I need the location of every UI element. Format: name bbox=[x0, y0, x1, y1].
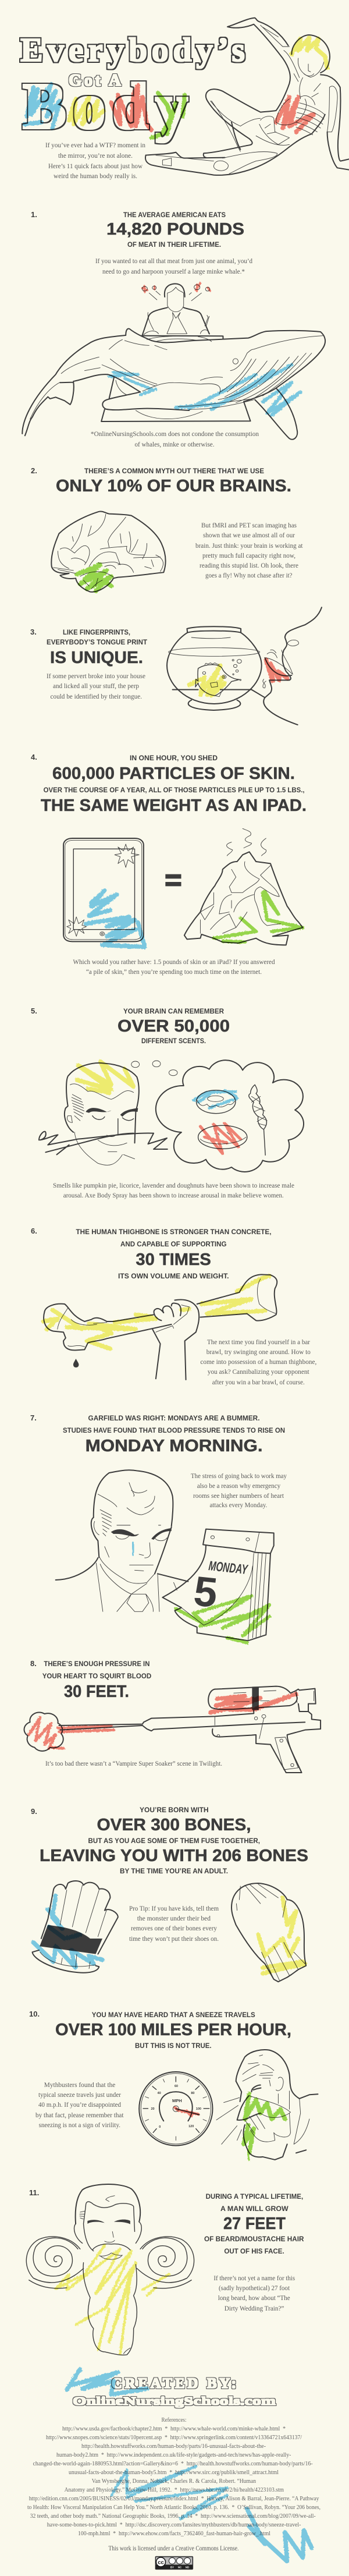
intro text bbox=[45, 141, 145, 180]
heading: BY THE TIME YOU’RE AN ADULT. bbox=[120, 1867, 228, 1875]
icon: Creative Commons badge: BY bbox=[170, 2566, 174, 2568]
text block: reading this stupid list. Oh look, there bbox=[200, 561, 298, 569]
heading: MONDAY MORNING. bbox=[86, 1437, 263, 1455]
heading: OUT OF HIS FACE. bbox=[224, 2247, 284, 2255]
number: 11. bbox=[29, 2188, 39, 2197]
footnote: *OnlineNursingSchools.com does not condone the consumption bbox=[91, 430, 259, 438]
footnote bbox=[91, 430, 259, 448]
text block: Mythbusters found that the bbox=[44, 2081, 115, 2089]
panel: fact 11 beard bbox=[26, 2184, 304, 2355]
heading bbox=[56, 467, 291, 495]
text block: by that fact, please remember that bbox=[35, 2111, 124, 2119]
text block bbox=[195, 521, 303, 579]
text block: typical sneeze travels just under bbox=[38, 2090, 121, 2099]
panel: fact 1 whale bbox=[22, 210, 325, 448]
heading: YOUR BRAIN CAN REMEMBER bbox=[123, 1007, 224, 1015]
text block: also be a reason why emergency bbox=[197, 1482, 280, 1490]
crayon scribbles on whale bbox=[109, 284, 301, 415]
references bbox=[27, 2417, 320, 2537]
heading: OF MEAT IN THEIR LIFETIME. bbox=[127, 240, 221, 249]
text block: brawl, try swinging one around. How to bbox=[206, 1348, 311, 1356]
text block bbox=[53, 1181, 294, 1199]
heading: OVER 100 MILES PER HOUR, bbox=[55, 2021, 291, 2039]
chart: speedometer: MPH bbox=[172, 2098, 182, 2103]
icon: pile of skin bbox=[184, 828, 302, 945]
heading bbox=[55, 2011, 291, 2050]
calendar text bbox=[191, 1558, 250, 1617]
references: Van Wynsberghe, Donna, Noback, Charles R. & Carola, Robert. “Human bbox=[92, 2478, 257, 2485]
text block: removes one of their bones every bbox=[131, 1924, 217, 1932]
text block: sneezing is not a sign of virility. bbox=[39, 2121, 120, 2129]
number: 5. bbox=[31, 1007, 37, 1015]
chart: speedometer: 60 bbox=[174, 2085, 178, 2088]
heading: GARFIELD WAS RIGHT: MONDAYS ARE A BUMMER. bbox=[88, 1414, 259, 1422]
illustration: open hand with sleeve bbox=[32, 1881, 118, 1973]
references: to Health: How Visceral Manipulation Can Help You.” North Atlantic Books, 2010. p. 136. * O’Sullivan, Robyn. “Your 206 bones, bbox=[27, 2504, 320, 2511]
heading bbox=[76, 1228, 271, 1280]
crayon scribble on skin pile bbox=[213, 892, 302, 942]
title: Body bbox=[23, 70, 188, 143]
text block: arousal. Axe Body Spray has been shown to increase arousal in make believe women. bbox=[63, 1191, 284, 1199]
heading bbox=[117, 1007, 230, 1045]
text block bbox=[95, 257, 252, 275]
calendar text: MONDAY bbox=[208, 1558, 250, 1577]
intro text: weird the human body really is. bbox=[54, 172, 137, 180]
panel: footer credits and references bbox=[27, 2369, 320, 2570]
text block: If you wanted to eat all that meat from just one animal, you’d bbox=[95, 257, 252, 265]
heading bbox=[40, 1806, 308, 1875]
crayon scribbles on footer bbox=[67, 2369, 312, 2561]
title: Everybody’s bbox=[20, 31, 245, 69]
number: 7. bbox=[30, 1413, 37, 1422]
crayon scribble on hand bbox=[33, 1896, 102, 1968]
text block: the monster under their bed bbox=[137, 1914, 211, 1922]
illustration: reclining anatomical man bbox=[145, 18, 349, 175]
icon: Creative Commons badge: ND bbox=[186, 2566, 190, 2568]
text block: goes a fly! Why not chase after it? bbox=[205, 571, 292, 579]
panel: title and intro bbox=[20, 18, 349, 180]
chart: speedometer: 80 bbox=[191, 2092, 194, 2095]
references: 32 teeth, and other body math.” National Geographic Books, 1996. p. 14 * http://www.sciensational.com/blog/2007/09/we-all- bbox=[30, 2513, 316, 2520]
heading: BUT AS YOU AGE SOME OF THEM FUSE TOGETHER, bbox=[88, 1837, 260, 1845]
illustration: fist holding femur bbox=[44, 1274, 277, 1380]
text block: attacks every Monday. bbox=[209, 1501, 267, 1509]
references: 100-mph.html * http://www.ehow.com/facts_7362460_fast-human-hair-grow_.html bbox=[78, 2531, 270, 2537]
heading: LIKE FINGERPRINTS, bbox=[63, 628, 130, 636]
illustration: sad man bbox=[56, 1470, 188, 1611]
text block bbox=[191, 1472, 287, 1509]
text block bbox=[47, 672, 145, 700]
references: http://health.howstuffworks.com/human-body/parts/16-unusual-facts-about-the- bbox=[81, 2443, 266, 2450]
heading: 14,820 POUNDS bbox=[106, 220, 244, 239]
text block: you ask? Cannibalizing your opponent bbox=[208, 1367, 309, 1376]
intro text: If you’ve ever had a WTF? moment in bbox=[45, 141, 145, 149]
heading: ITS OWN VOLUME AND WEIGHT. bbox=[118, 1272, 229, 1280]
intro text: Here’s 11 quick facts about just how bbox=[48, 162, 143, 170]
icon: equals sign bbox=[165, 874, 181, 886]
crayon scribble on femur bbox=[44, 1276, 269, 1349]
panel: fact 3 tongue print bbox=[30, 607, 322, 725]
icon: Creative Commons badge: cc bbox=[158, 2559, 164, 2566]
footnote: of whales, minke or otherwise. bbox=[135, 440, 214, 448]
heading: THERE’S A COMMON MYTH OUT THERE THAT WE USE bbox=[84, 467, 264, 475]
text block: pretty much full capacity right now, bbox=[202, 551, 295, 559]
illustration: sneezing man bbox=[216, 2050, 318, 2160]
icon: brain bbox=[51, 512, 166, 592]
text block: time they won’t put their shoes on. bbox=[129, 1934, 219, 1943]
heading: THERE’S ENOUGH PRESSURE IN bbox=[44, 1660, 149, 1668]
references: http://www.usda.gov/factbook/chapter2.htm * http://www.whale-world.com/minke-whale.html * bbox=[62, 2426, 286, 2432]
icon: tear scribble bbox=[133, 1543, 134, 1554]
text block: Dirty Wedding Train?” bbox=[225, 2304, 284, 2312]
illustration: man with long beard bbox=[26, 2184, 194, 2355]
credits title bbox=[73, 2376, 276, 2408]
text block bbox=[73, 958, 275, 976]
references: unusual-facts-about-the-human-body5.htm * http://www.sirc.org/publik/smell_attract.html bbox=[69, 2469, 279, 2476]
chart: speedometer bbox=[139, 2072, 212, 2146]
heading: THE AVERAGE AMERICAN EATS bbox=[123, 211, 226, 219]
crayon scribble on calendar bbox=[176, 1596, 269, 1643]
icon: Creative Commons badge bbox=[155, 2556, 193, 2570]
license text: This work is licensed under a Creative Commons License. bbox=[108, 2544, 238, 2552]
icon: cracked iPad bbox=[63, 838, 144, 941]
heading: 600,000 PARTICLES OF SKIN. bbox=[52, 764, 295, 783]
text block: 40 m.p.h. If you’re disappointed bbox=[38, 2100, 121, 2109]
references: References: bbox=[162, 2417, 187, 2423]
number: 4. bbox=[31, 753, 37, 761]
text block: long beard, how about “The bbox=[218, 2294, 290, 2302]
text block: Smells like pumpkin pie, licorice, lavender and doughnuts have been shown to increase male bbox=[53, 1181, 294, 1189]
panel: fact 2 brain bbox=[31, 466, 303, 592]
icon: tear-off calendar bbox=[162, 1529, 274, 1640]
icon: Creative Commons badge: NC bbox=[178, 2566, 182, 2568]
title: Got A bbox=[69, 71, 121, 90]
references: Anatomy and Physiology.” McGraw-Hill, 1992. * http://news.bbc.co.uk/2/hi/health/4223103.stm bbox=[65, 2487, 284, 2493]
heading: AND CAPABLE OF SUPPORTING bbox=[120, 1240, 227, 1248]
crayon scribble on hair bbox=[77, 1061, 134, 1093]
heading: BUT THIS IS NOT TRUE. bbox=[135, 2042, 212, 2050]
text block: could be identified by their tongue. bbox=[50, 692, 142, 700]
heading: STUDIES HAVE FOUND THAT BLOOD PRESSURE TENDS TO RISE ON bbox=[63, 1426, 285, 1434]
crayon scribble on brain bbox=[77, 565, 111, 591]
illustration: fish bowl and licking face bbox=[167, 607, 322, 725]
number: 2. bbox=[31, 466, 37, 475]
heading bbox=[41, 754, 307, 815]
number: 6. bbox=[31, 1227, 37, 1235]
illustration: man at table eating whale bbox=[22, 284, 325, 440]
crayon scribbles in cloud bbox=[194, 1090, 240, 1154]
heading: IN ONE HOUR, YOU SHED bbox=[130, 754, 218, 762]
text block: Which would you rather have: 1.5 pounds of skin or an iPad? If you answered bbox=[73, 958, 275, 966]
panel: fact 9 bones bbox=[31, 1806, 308, 1982]
text block: The next time you find yourself in a bar bbox=[207, 1338, 310, 1346]
heading bbox=[106, 211, 244, 249]
heading: DURING A TYPICAL LIFETIME, bbox=[206, 2192, 303, 2201]
text block: “a pile of skin,” then you’re spending too much time on the internet. bbox=[86, 968, 262, 976]
text block: and licked all your stuff, the perp bbox=[53, 682, 139, 690]
text block: rooms see higher numbers of heart bbox=[193, 1491, 284, 1500]
text block bbox=[200, 1338, 316, 1386]
chart: speedometer: 0 bbox=[159, 2125, 161, 2129]
number: 9. bbox=[31, 1807, 37, 1816]
text block bbox=[213, 2274, 295, 2312]
credits title: OnlineNursingSchools.com bbox=[73, 2395, 276, 2408]
heading: EVERYBODY’S TONGUE PRINT bbox=[47, 638, 148, 646]
heading: OVER THE COURSE OF A YEAR, ALL OF THOSE PARTICLES PILE UP TO 1.5 LBS., bbox=[44, 786, 305, 794]
heading: OVER 50,000 bbox=[117, 1017, 230, 1036]
panel: fact 7 Monday bbox=[30, 1413, 287, 1643]
text block: after you win a bar brawl, of course. bbox=[212, 1378, 305, 1386]
title bbox=[20, 31, 245, 143]
panel: fact 10 sneeze bbox=[29, 2010, 318, 2160]
text block: come into possession of a human thighbone, bbox=[200, 1358, 316, 1366]
chart: speedometer: 100 bbox=[196, 2107, 201, 2111]
crayon scribbles on tissue bbox=[244, 2094, 285, 2160]
crayon scribble on beard bbox=[56, 2245, 169, 2354]
heading: 30 FEET. bbox=[64, 1682, 129, 1701]
heading bbox=[204, 2192, 304, 2255]
heading bbox=[42, 1660, 152, 1701]
references: changed-the-world-again-1880953.html?action=Gallery&ino=6 * http://health.howstuffworks.com/human-body/parts/16- bbox=[33, 2461, 313, 2467]
text block: shown that we use almost all of our bbox=[203, 531, 295, 539]
text block bbox=[35, 2081, 124, 2129]
heading: LEAVING YOU WITH 206 BONES bbox=[40, 1847, 308, 1865]
panel: fact 5 scents bbox=[31, 1007, 304, 1199]
heading bbox=[47, 628, 148, 667]
credits title: CREATED BY: bbox=[112, 2376, 236, 2391]
heading: YOUR HEART TO SQUIRT BLOOD bbox=[42, 1672, 152, 1680]
illustration: super soaker bbox=[24, 1686, 320, 1773]
heading bbox=[63, 1414, 285, 1455]
number: 3. bbox=[30, 628, 37, 636]
chart: speedometer: 20 bbox=[151, 2107, 155, 2111]
heading: OF BEARD/MOUSTACHE HAIR bbox=[204, 2235, 304, 2243]
heading: DIFFERENT SCENTS. bbox=[141, 1037, 206, 1045]
number: 1. bbox=[31, 210, 37, 219]
heading: THE SAME WEIGHT AS AN IPAD. bbox=[41, 796, 307, 815]
crayon scribbles on fish and tongue bbox=[189, 660, 287, 696]
crayon scribbles on title bbox=[24, 84, 185, 138]
heading: THE HUMAN THIGHBONE IS STRONGER THAN CONCRETE, bbox=[76, 1228, 271, 1236]
heading: YOU MAY HAVE HEARD THAT A SNEEZE TRAVELS bbox=[92, 2011, 255, 2019]
references: http://www.snopes.com/science/stats/10percent.asp * http://www.springerlink.com/content/v13364721x643137/ bbox=[46, 2435, 302, 2441]
crayon scribble on fist bbox=[258, 1898, 305, 1973]
crayon scribbles on soaker bbox=[29, 1694, 296, 1748]
heading: IS UNIQUE. bbox=[50, 649, 143, 667]
crayon scribble on needle bbox=[174, 2107, 198, 2116]
panel: fact 8 heart pressure bbox=[24, 1659, 320, 1773]
text block: need to go and harpoon yourself a large minke whale.* bbox=[102, 267, 245, 275]
references: have-some-bones-to-pick.html * http://dsc.discovery.com/fansites/mythbusters/db/human-body/sneeze-travel- bbox=[47, 2522, 301, 2528]
heading: OVER 300 BONES, bbox=[97, 1816, 251, 1834]
panel: fact 4 skin and iPad bbox=[31, 753, 307, 976]
number: 10. bbox=[29, 2010, 40, 2018]
text block: The stress of going back to work may bbox=[191, 1472, 287, 1480]
heading: A MAN WILL GROW bbox=[220, 2205, 289, 2213]
text block: If there’s not yet a name for this bbox=[213, 2274, 295, 2282]
illustration: closed fist bbox=[232, 1883, 306, 1982]
panel: fact 6 thighbone bbox=[31, 1227, 316, 1386]
heading: ONLY 10% OF OUR BRAINS. bbox=[56, 477, 291, 495]
text block bbox=[129, 1904, 219, 1943]
crayon scribbles on man bbox=[276, 38, 327, 132]
text block: It’s too bad there wasn’t a “Vampire Super Soaker” scene in Twilight. bbox=[45, 1759, 222, 1767]
illustration: man smelling bbox=[39, 1063, 168, 1165]
chart: speedometer: 40 bbox=[158, 2092, 161, 2095]
heading: 30 TIMES bbox=[136, 1250, 211, 1269]
text block: Pro Tip: If you have kids, tell them bbox=[129, 1904, 219, 1912]
heading: 27 FEET bbox=[223, 2214, 286, 2233]
calendar text: 5 bbox=[191, 1568, 220, 1617]
crayon scribble on iPad bbox=[86, 891, 145, 947]
number: 8. bbox=[30, 1659, 37, 1668]
references: http://edition.cnn.com/2005/BUSINESS/02/03/monday.pressure/index.html * Harvey, Alison & Barral, Jean-Pierre. “A Pathway bbox=[29, 2496, 319, 2502]
text block: brain. Just think: your brain is working at bbox=[195, 541, 303, 550]
chart: speedometer: 120 bbox=[188, 2125, 194, 2128]
intro text: the mirror, you’re not alone. bbox=[58, 151, 133, 160]
icon: thought cloud bbox=[131, 1060, 304, 1172]
references: human-body2.htm * http://www.independent.co.uk/life-style/gadgets-and-tech/news/has-apple-really- bbox=[56, 2452, 291, 2458]
text block: If some pervert broke into your house bbox=[47, 672, 145, 680]
text block: (sadly hypothetical) 27 foot bbox=[219, 2284, 290, 2292]
text block: But fMRI and PET scan imaging has bbox=[201, 521, 297, 529]
heading: YOU’RE BORN WITH bbox=[140, 1806, 209, 1814]
